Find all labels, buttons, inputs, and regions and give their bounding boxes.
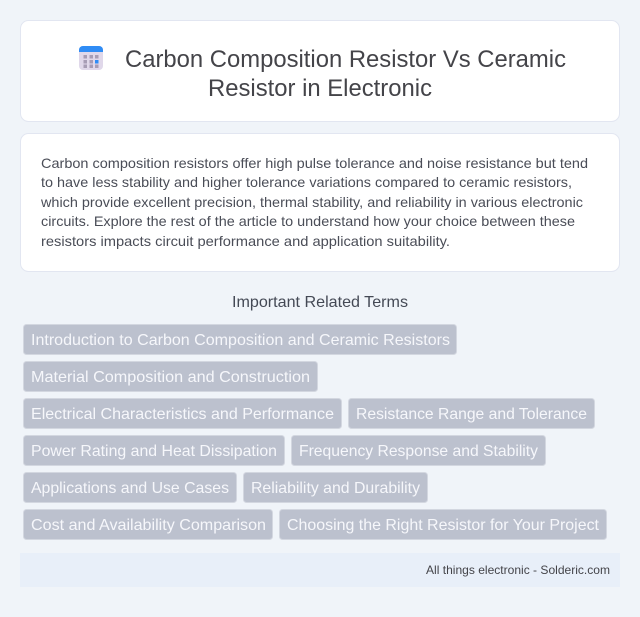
summary text: circuits. Explore the rest of the article to understand how your choice between these	[41, 213, 575, 229]
tag: electrical	[24, 398, 342, 428]
title: Resistor in Electronic	[208, 75, 432, 102]
footer credit: All things electronic - Solderic.com	[426, 563, 610, 577]
tag: frequency	[292, 436, 546, 466]
related terms heading: Important Related Terms	[232, 294, 408, 311]
tag: resistance	[348, 398, 594, 428]
tag: choosing: Choosing the Right Resistor for Your Project	[287, 517, 600, 534]
tag: cost: Cost and Availability Comparison	[31, 517, 266, 534]
summary text	[40, 155, 588, 249]
tag: reliability: Reliability and Durability	[251, 480, 420, 497]
tag: material	[24, 362, 318, 392]
tag: introduction: Introduction to Carbon Composition and Ceramic Resistors	[31, 332, 450, 349]
tag: cost	[24, 510, 272, 540]
summary text: Carbon composition resistors offer high pulse tolerance and noise resistance but tend	[41, 155, 588, 171]
tag: power: Power Rating and Heat Dissipation	[31, 443, 277, 460]
title: Carbon Composition Resistor Vs Ceramic	[125, 46, 566, 73]
tag: choosing	[280, 510, 606, 540]
summary text: to have less stability and higher tolerance variations compared to ceramic resistors,	[41, 174, 572, 190]
tag: frequency: Frequency Response and Stability	[299, 443, 538, 460]
tag: applications	[24, 472, 236, 502]
summary card	[20, 134, 620, 272]
tag: reliability	[244, 472, 428, 502]
tag: resistance: Resistance Range and Tolerance	[356, 406, 587, 423]
tag: electrical: Electrical Characteristics and Performance	[31, 406, 334, 423]
summary text: resistors impacts circuit performance and application suitability.	[41, 233, 450, 249]
tag: power	[24, 436, 284, 466]
tag: material: Material Composition and Construction	[31, 369, 310, 386]
summary text: which provide excellent precision, thermal stability, and reliability in various electronic	[40, 194, 583, 210]
footer	[20, 553, 620, 587]
tag: applications: Applications and Use Cases	[31, 480, 229, 497]
header card	[20, 20, 620, 122]
title	[125, 46, 566, 102]
related terms tags	[24, 324, 606, 540]
tag: introduction	[24, 324, 456, 354]
icon: calendar grid	[79, 46, 103, 70]
